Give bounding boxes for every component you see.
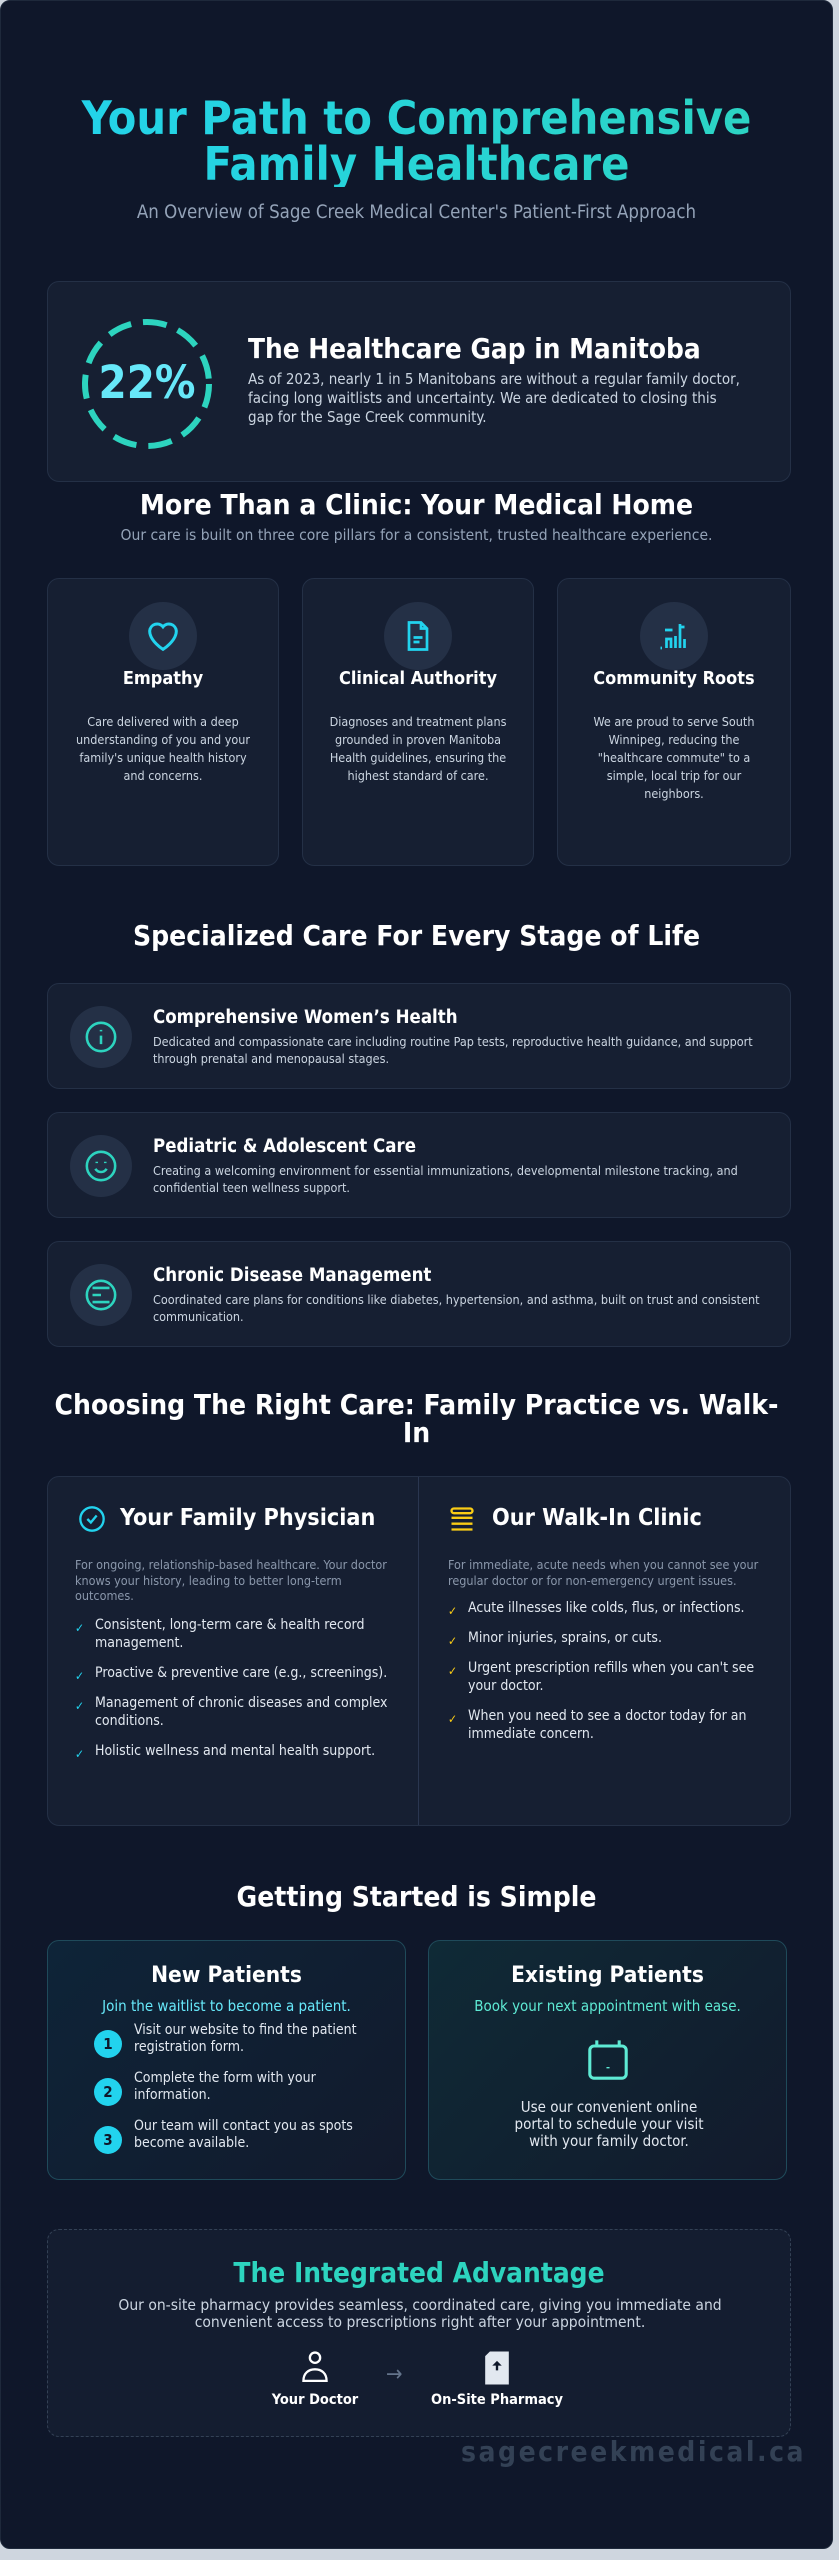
icon: info [70,1006,132,1068]
column: walk-in clinic: When you need to see a doctor today for an immediate concern. [468,1708,746,1742]
column: family physician: Your Family Physician [120,1504,375,1531]
column: walk-in clinic: ✓ [448,1712,457,1726]
icon: pharmacy [431,2352,563,2408]
column: family physician: Consistent, long-term care & health record management. [95,1617,364,1651]
panel: women's health [47,983,791,1089]
heading: getting started: Getting Started is Simple [237,1880,596,1913]
icon: pharmacy: On-Site Pharmacy [431,2392,563,2408]
column: family physician: Proactive & preventive care (e.g., screenings). [95,1665,387,1681]
column: family physician: Holistic wellness and mental health support. [95,1743,375,1759]
column: walk-in clinic: Urgent prescription refills when you can't see your doctor. [468,1660,754,1694]
icon: heart [129,602,197,670]
panel: clinical authority: Clinical Authority [339,668,497,689]
panel: new patients: New Patients [151,1962,302,1988]
title: Your Path to Comprehensive [82,91,751,145]
icon: smile [70,1135,132,1197]
panel: women's health: Comprehensive Women’s Health [153,1007,458,1028]
column: walk-in clinic: For immediate, acute needs when you cannot see your regular doctor or for non-emergency urgent issues. [448,1557,758,1588]
panel: new patients: Join the waitlist to become a patient. [102,1997,351,2015]
column: walk-in clinic: Acute illnesses like colds, flus, or infections. [468,1600,745,1616]
panel: pediatric [47,1112,791,1218]
panel: clinical authority [302,578,534,866]
column: family physician: ✓ [75,1699,84,1713]
column: walk-in clinic: Our Walk-In Clinic [492,1504,702,1531]
column: walk-in clinic: Minor injuries, sprains, or cuts. [468,1630,662,1646]
subtitle: An Overview of Sage Creek Medical Center's Patient-First Approach [137,202,696,223]
panel: community roots: We are proud to serve South Winnipeg, reducing the "healthcare commute" to a simple, local trip for our neighbors. [594,714,754,801]
panel: existing patients [428,1940,787,2180]
icon: list circle [70,1264,132,1326]
text: As of 2023, nearly 1 in 5 Manitobans are without a regular family doctor, facing long waitlists and uncertainty. We are dedicated to closing this gap for the Sage Creek community. [248,370,740,426]
step 1: Visit our website to find the patient registration form. [134,2022,357,2055]
panel: existing patients: Book your next appointment with ease. [474,1997,741,2015]
arrow: → [386,2362,403,2387]
step 3: Our team will contact you as spots become available. [134,2118,353,2151]
stat: 22% ring [82,319,212,449]
step 2: 2 [103,2083,113,2101]
panel: community roots: Community Roots [593,668,755,689]
heading: specialized care: Specialized Care For Every Stage of Life [133,919,700,952]
panel: new patients [47,1940,406,2180]
column: walk-in clinic: ✓ [448,1664,457,1678]
heading: medical home: More Than a Clinic: Your Medical Home [140,488,693,521]
panel: empathy: Care delivered with a deep understanding of you and your family's unique health history and concerns. [76,714,250,783]
column: family physician: For ongoing, relationship-based healthcare. Your doctor knows your history, leading to better long-term outcomes. [75,1557,387,1603]
panel: comparison [47,1476,791,1826]
stat: 22% ring: 22% [99,356,195,409]
step 1: 1 [103,2035,113,2053]
step 2: Complete the form with your information. [134,2070,316,2103]
column: family physician: Management of chronic diseases and complex conditions. [95,1695,387,1729]
icon: doctor: Your Doctor [272,2392,358,2408]
subtitle: pillars: Our care is built on three core pillars for a consistent, trusted healthcare experience. [121,526,712,544]
title [0,95,833,187]
column: family physician [48,1477,419,1825]
icon: calendar [588,2040,628,2080]
panel: integrated advantage [47,2229,791,2437]
panel: integrated advantage: Our on-site pharmacy provides seamless, coordinated care, giving you immediate and convenient access to prescriptions right after your appointment. [118,2296,722,2331]
panel: healthcare gap [47,281,791,482]
panel: clinical authority: Diagnoses and treatment plans grounded in proven Manitoba Health guidelines, ensuring the highest standard of care. [330,714,506,783]
step 3: 3 [103,2131,113,2149]
column: walk-in clinic: ✓ [448,1634,457,1648]
icon: document [384,602,452,670]
icon: chart [640,602,708,670]
title: Family Healthcare [204,137,629,191]
column: walk-in clinic [448,1504,758,1742]
panel: chronic disease [47,1241,791,1347]
heading: choosing right care: Choosing The Right Care: Family Practice vs. Walk-In [55,1388,778,1449]
column: walk-in clinic: ✓ [448,1604,457,1618]
panel: community roots [557,578,791,866]
panel: empathy [47,578,279,866]
column: family physician: ✓ [75,1621,84,1635]
column: family physician: ✓ [75,1669,84,1683]
panel: pediatric: Pediatric & Adolescent Care [153,1136,416,1157]
panel: pediatric: Creating a welcoming environment for essential immunizations, developmental milestone tracking, and confidential teen wellness support. [153,1163,738,1195]
panel: chronic disease: Coordinated care plans for conditions like diabetes, hypertension, and asthma, built on trust and consistent communication. [153,1292,760,1324]
icon: check circle [79,1506,105,1532]
panel: existing patients: Existing Patients [511,1962,704,1988]
panel: existing patients: Use our convenient online portal to schedule your visit with your family doctor. [514,2098,704,2150]
panel: women's health: Dedicated and compassionate care including routine Pap tests, reproductive health guidance, and support through prenatal and menopausal stages. [153,1034,753,1066]
footer: website: sagecreekmedical.ca [461,2435,806,2468]
panel: chronic disease: Chronic Disease Management [153,1265,431,1286]
heading: The Healthcare Gap in Manitoba [248,332,701,365]
icon: doctor [272,2351,358,2408]
icon: stack [450,1507,474,1531]
column: family physician: ✓ [75,1747,84,1761]
panel: empathy: Empathy [123,668,203,689]
panel: integrated advantage: The Integrated Advantage [233,2256,605,2289]
